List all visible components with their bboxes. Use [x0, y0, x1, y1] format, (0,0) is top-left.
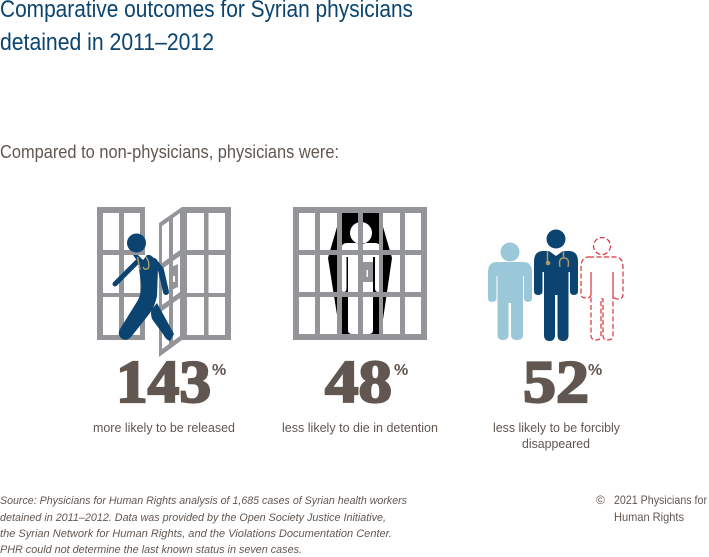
stat: 48% less likely to die in detention: % — [394, 362, 408, 379]
source note: PHR could not determine the last known status in seven cases. — [0, 544, 302, 556]
icon: doctor leaving cell through open door — [97, 207, 231, 357]
stat: 52% less likely to be forcibly disappeared — [493, 349, 620, 451]
open door — [159, 207, 182, 357]
stat: 143% more likely to be released: % — [212, 362, 226, 379]
coffin — [328, 213, 392, 340]
stat: 52% less likely to be forcibly disappeared: % — [588, 362, 602, 379]
source note: the Syrian Network for Human Rights, and the Violations Documentation Center. — [0, 528, 392, 540]
copyright: © — [596, 493, 605, 507]
source note: Source: Physicians for Human Rights analysis of 1,685 cases of Syrian health workers — [0, 495, 407, 507]
lock plate — [362, 262, 373, 282]
stat: 143% more likely to be released: 143 — [116, 349, 211, 415]
doctor figure — [115, 234, 174, 341]
title — [0, 0, 413, 56]
light blue civilian figure — [488, 242, 532, 340]
stat: 48% less likely to die in detention: 48 — [325, 349, 392, 415]
copyright: Human Rights — [614, 510, 684, 524]
stat: 52% less likely to be forcibly disappeared: disappeared — [522, 436, 590, 451]
navy doctor figure — [534, 230, 578, 341]
icon: figure in coffin behind bars — [293, 207, 427, 340]
red dashed missing figure — [581, 238, 623, 340]
source note: detained in 2011–2012. Data was provided by the Open Society Justice Initiative, — [0, 512, 386, 524]
stat: 52% less likely to be forcibly disappeared: less likely to be forcibly — [493, 420, 620, 435]
stat: 143% more likely to be released — [93, 349, 235, 435]
stat: 143% more likely to be released: more likely to be released — [93, 420, 235, 435]
right part of cell bars — [182, 207, 231, 340]
source note — [0, 495, 407, 556]
copyright — [596, 493, 707, 524]
stat: 48% less likely to die in detention — [282, 349, 438, 435]
white figure — [341, 222, 381, 334]
cell bars — [293, 207, 427, 340]
icon: three figures — [488, 230, 623, 341]
lock plate — [169, 264, 178, 291]
title: detained in 2011–2012 — [0, 29, 214, 56]
stat: 48% less likely to die in detention: less likely to die in detention — [282, 420, 438, 435]
left part of cell bars — [97, 207, 145, 340]
subheading: Compared to non-physicians, physicians were: — [0, 142, 339, 162]
stat: 52% less likely to be forcibly disappeared: 52 — [523, 349, 589, 415]
